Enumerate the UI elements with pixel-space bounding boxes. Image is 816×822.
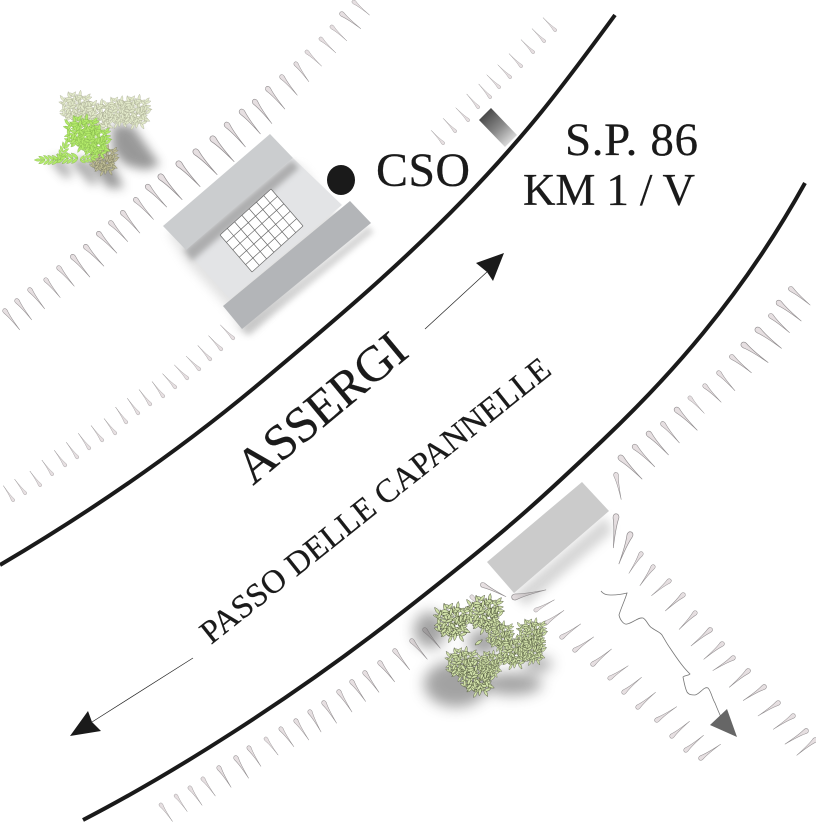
upper wing shadow [184, 160, 299, 261]
arrow: direction to Assergi [425, 253, 504, 329]
bright green foliage [34, 108, 117, 166]
stream with flow arrow [601, 591, 737, 737]
building body [186, 158, 342, 299]
road edge: lower curve [83, 183, 805, 820]
marker dot: CSO [327, 165, 355, 195]
row of slope ticks below the lower road (right) [613, 285, 812, 500]
label: KM 1 / V: KM 1 / V [523, 165, 695, 215]
building ground shadow [168, 165, 345, 332]
lower building roof [487, 482, 609, 593]
upper row of slope ticks [2, 0, 371, 331]
upper wing roof [163, 134, 293, 250]
row of slope ticks on the right of the stream [610, 514, 816, 757]
solar panel grid [220, 189, 303, 272]
lower row of slope ticks [158, 594, 487, 822]
label: ASSERGI: ASSERGI [224, 320, 418, 494]
dark lower foliage [83, 140, 124, 181]
small gradient building [479, 108, 517, 147]
pale upper foliage [53, 85, 157, 143]
tree shadow [50, 125, 160, 188]
foliage [426, 588, 552, 703]
tree: upper left [34, 85, 160, 188]
lower building shadow [514, 516, 612, 606]
label: S.P. 86: S.P. 86 [565, 114, 698, 166]
tree: lower centre [414, 588, 552, 707]
tree shadow [414, 612, 552, 707]
lower building [487, 482, 612, 606]
building: main complex with solar panels [163, 134, 374, 336]
road edge: upper curve [0, 15, 615, 565]
row of slope ticks on the left of the stream [479, 582, 722, 761]
lower wing shadow [240, 226, 374, 336]
arrow: direction to Passo delle Capannelle [70, 658, 193, 736]
row of slope ticks beside the upper road [2, 16, 557, 502]
lower wing roof [223, 201, 371, 329]
label: CSO: CSO [376, 144, 470, 197]
label: PASSO DELLE CAPANNELLE: PASSO DELLE CAPANNELLE [194, 351, 558, 651]
